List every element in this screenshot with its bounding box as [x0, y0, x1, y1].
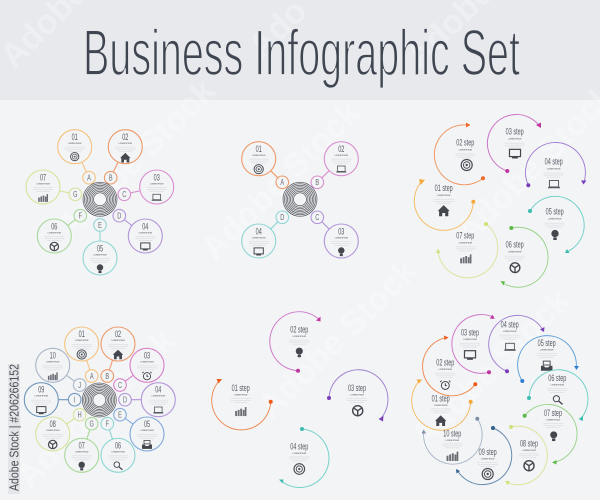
- step 01: LOREM IPSUM: [434, 405, 448, 407]
- watermarks: Adobe Stock: [251, 252, 425, 426]
- node 04 D: LOREM IPSUM: [252, 238, 266, 240]
- step 01: 01 step: [232, 382, 250, 393]
- node 07 G: LOREM IPSUM: [36, 184, 50, 186]
- node 09 I: 09: [38, 384, 44, 395]
- node 02 B: LOREM IPSUM: [119, 143, 132, 145]
- step 05: 05 step: [538, 337, 556, 348]
- step 04: [279, 427, 329, 488]
- watermarks: Adobe Stock: [194, 94, 368, 268]
- node 04 D: LOREM IPSUM: [139, 232, 152, 234]
- node 01 A: A: [280, 179, 284, 187]
- step 03: [452, 314, 495, 374]
- step 04: LOREM IPSUM: [547, 169, 561, 171]
- node 04 D: 04: [256, 226, 262, 237]
- node 08 H: [36, 408, 86, 451]
- step 07: LOREM IPSUM: [459, 242, 472, 244]
- panel: ten-part circle diagram: [24, 327, 175, 472]
- node 01 A: [58, 130, 95, 184]
- stock id side label: Adobe Stock | #206266152: [8, 364, 22, 491]
- step 02: [270, 312, 320, 373]
- step 07: 07 step: [456, 230, 474, 241]
- step 05: LOREM IPSUM: [540, 350, 554, 352]
- step 04: LOREM IPSUM: [293, 453, 306, 455]
- node 04 D: [113, 209, 162, 253]
- node 03 C: 03: [144, 350, 150, 361]
- panel: ten-step arcs: [412, 314, 588, 485]
- node 06 F: 06: [115, 440, 121, 451]
- step 05: LOREM IPSUM: [548, 219, 562, 221]
- step 05: [518, 336, 579, 383]
- panel: four-part circle diagram: [242, 142, 358, 258]
- node 04 D: D: [117, 213, 121, 221]
- step 03: [327, 370, 388, 422]
- node 03 C: C: [122, 191, 126, 199]
- step 03: 03 step: [348, 382, 366, 393]
- node 01 A: 01: [256, 144, 262, 155]
- node 05 E: LOREM IPSUM: [93, 254, 107, 256]
- step 06: 06 step: [506, 239, 524, 250]
- step 02: 02 step: [436, 357, 454, 368]
- step 06: [527, 370, 588, 421]
- step 04: 04 step: [545, 156, 563, 167]
- node 01 A: 01: [72, 132, 78, 143]
- node 06 F: F: [106, 421, 109, 429]
- node 02 B: 02: [115, 328, 121, 339]
- watermarks: Adobe Stock: [9, 322, 183, 496]
- node 02 B: LOREM IPSUM: [111, 340, 125, 342]
- step 02: LOREM IPSUM: [293, 336, 306, 338]
- node 03 C: C: [118, 382, 122, 390]
- panel: seven-part circle diagram: [26, 130, 174, 275]
- node 06 F: [101, 417, 135, 472]
- node 05 E: E: [118, 412, 122, 420]
- node 03 C: C: [315, 214, 319, 222]
- node 06 F: 06: [51, 221, 57, 232]
- node 01 A: LOREM IPSUM: [252, 155, 266, 157]
- node 10 J: J: [78, 382, 81, 390]
- step 03: 03 step: [461, 327, 479, 338]
- step 01: LOREM IPSUM: [234, 394, 248, 396]
- step 02: [434, 122, 485, 185]
- node 01 A: LOREM IPSUM: [68, 143, 82, 145]
- step 03: 03 step: [506, 126, 524, 137]
- panel: seven-step arcs: [414, 114, 586, 287]
- node 03 C: [118, 170, 174, 204]
- step 08: LOREM IPSUM: [522, 450, 536, 452]
- step 06: LOREM IPSUM: [551, 384, 564, 386]
- step 03: LOREM IPSUM: [350, 394, 364, 396]
- node 02 B: 02: [338, 144, 344, 155]
- step 07: LOREM IPSUM: [546, 420, 560, 422]
- step 03: [487, 114, 541, 173]
- step 09: LOREM IPSUM: [481, 458, 495, 460]
- node 02 B: [101, 327, 135, 382]
- node 02 B: [311, 142, 358, 189]
- node 01 A: 01: [79, 328, 85, 339]
- step 01: 01 step: [435, 182, 453, 193]
- node 03 C: [311, 211, 358, 258]
- node 01 A: A: [90, 373, 94, 381]
- step 09: 09 step: [479, 446, 497, 457]
- node 03 C: 03: [154, 172, 160, 183]
- node 08 H: 08: [50, 418, 56, 429]
- watermarks: Adobe Stock: [404, 282, 578, 456]
- node 10 J: [36, 348, 86, 391]
- step 01: [212, 379, 273, 430]
- node 07 G: 07: [40, 172, 46, 183]
- step 04: 04 step: [290, 441, 308, 452]
- step 07: [523, 404, 577, 464]
- node 07 G: G: [90, 421, 94, 429]
- step 07: [436, 222, 498, 278]
- node 07 G: [65, 417, 99, 472]
- step 09: [456, 426, 512, 485]
- node 09 I: [24, 383, 81, 417]
- node 04 D: 04: [155, 384, 162, 395]
- node 02 B: LOREM IPSUM: [335, 155, 348, 157]
- node 03 C: LOREM IPSUM: [150, 184, 164, 186]
- step 05: 05 step: [546, 206, 564, 217]
- node 01 A: [242, 142, 289, 189]
- step 10: 10 step: [443, 428, 461, 439]
- step 04: LOREM IPSUM: [503, 331, 517, 333]
- step 01: [412, 380, 473, 430]
- step 04: 04 step: [501, 319, 519, 330]
- step 08: 08 step: [520, 438, 538, 449]
- node 08 H: H: [78, 412, 82, 420]
- node 02 B: B: [105, 373, 109, 381]
- node 04 D: [242, 211, 289, 258]
- node 03 C: LOREM IPSUM: [335, 238, 348, 240]
- node 05 E: E: [98, 222, 102, 230]
- node 09 I: I: [74, 397, 76, 405]
- node 07 G: G: [73, 191, 77, 199]
- watermarks: Adobe Stock: [49, 72, 223, 246]
- node 05 E: LOREM IPSUM: [140, 430, 154, 432]
- header band: [0, 0, 600, 100]
- node 06 F: [37, 209, 87, 253]
- step 02: [423, 336, 477, 396]
- node 06 F: LOREM IPSUM: [111, 451, 125, 453]
- node 01 A: A: [87, 175, 91, 183]
- node 07 G: LOREM IPSUM: [75, 451, 89, 453]
- node 04 D: D: [123, 397, 127, 405]
- step 10: [422, 417, 482, 464]
- node 03 C: LOREM IPSUM: [140, 361, 154, 363]
- node 04 D: LOREM IPSUM: [152, 396, 165, 398]
- node 04 D: D: [280, 214, 284, 222]
- step 04: [489, 315, 544, 373]
- node 06 F: F: [79, 213, 82, 221]
- center rings: [83, 182, 117, 216]
- node 09 I: LOREM IPSUM: [35, 396, 48, 398]
- step 02: LOREM IPSUM: [439, 369, 452, 371]
- node 05 E: [83, 219, 117, 275]
- step 04: [525, 143, 586, 188]
- center rings: [82, 383, 116, 417]
- node 04 D: 04: [142, 221, 149, 232]
- step 02: 02 step: [456, 137, 474, 148]
- panel: four-step arcs: [212, 312, 388, 488]
- step 05: [528, 196, 584, 253]
- node 07 G: [26, 170, 82, 204]
- node 05 E: 05: [97, 243, 103, 254]
- step 06: 06 step: [548, 372, 566, 383]
- node 10 J: 10: [50, 350, 56, 361]
- step 03: LOREM IPSUM: [508, 139, 522, 141]
- node 03 C: 03: [338, 226, 344, 237]
- center rings: [283, 182, 317, 216]
- step 10: LOREM IPSUM: [446, 440, 459, 442]
- node 08 H: LOREM IPSUM: [46, 430, 60, 432]
- node 01 A: [65, 327, 99, 382]
- node 04 D: [119, 383, 175, 417]
- step 01: LOREM IPSUM: [437, 195, 451, 197]
- step 08: [505, 425, 547, 485]
- step 07: 07 step: [544, 407, 562, 418]
- node 05 E: [114, 408, 164, 451]
- node 05 E: 05: [144, 418, 150, 429]
- step 01: 01 step: [432, 393, 450, 404]
- step 03: LOREM IPSUM: [463, 339, 477, 341]
- node 03 C: [114, 348, 164, 391]
- node 02 B: 02: [122, 132, 128, 143]
- node 02 B: [104, 130, 142, 184]
- node 07 G: 07: [79, 440, 85, 451]
- node 01 A: LOREM IPSUM: [75, 340, 89, 342]
- step 02: LOREM IPSUM: [459, 149, 472, 151]
- step 06: LOREM IPSUM: [508, 252, 522, 254]
- step 06: [500, 226, 548, 287]
- node 02 B: B: [315, 179, 319, 187]
- step 02: 02 step: [290, 324, 308, 335]
- step 01: [414, 179, 475, 230]
- node 10 J: LOREM IPSUM: [46, 361, 60, 363]
- node 06 F: LOREM IPSUM: [48, 232, 61, 234]
- node 02 B: B: [109, 175, 113, 183]
